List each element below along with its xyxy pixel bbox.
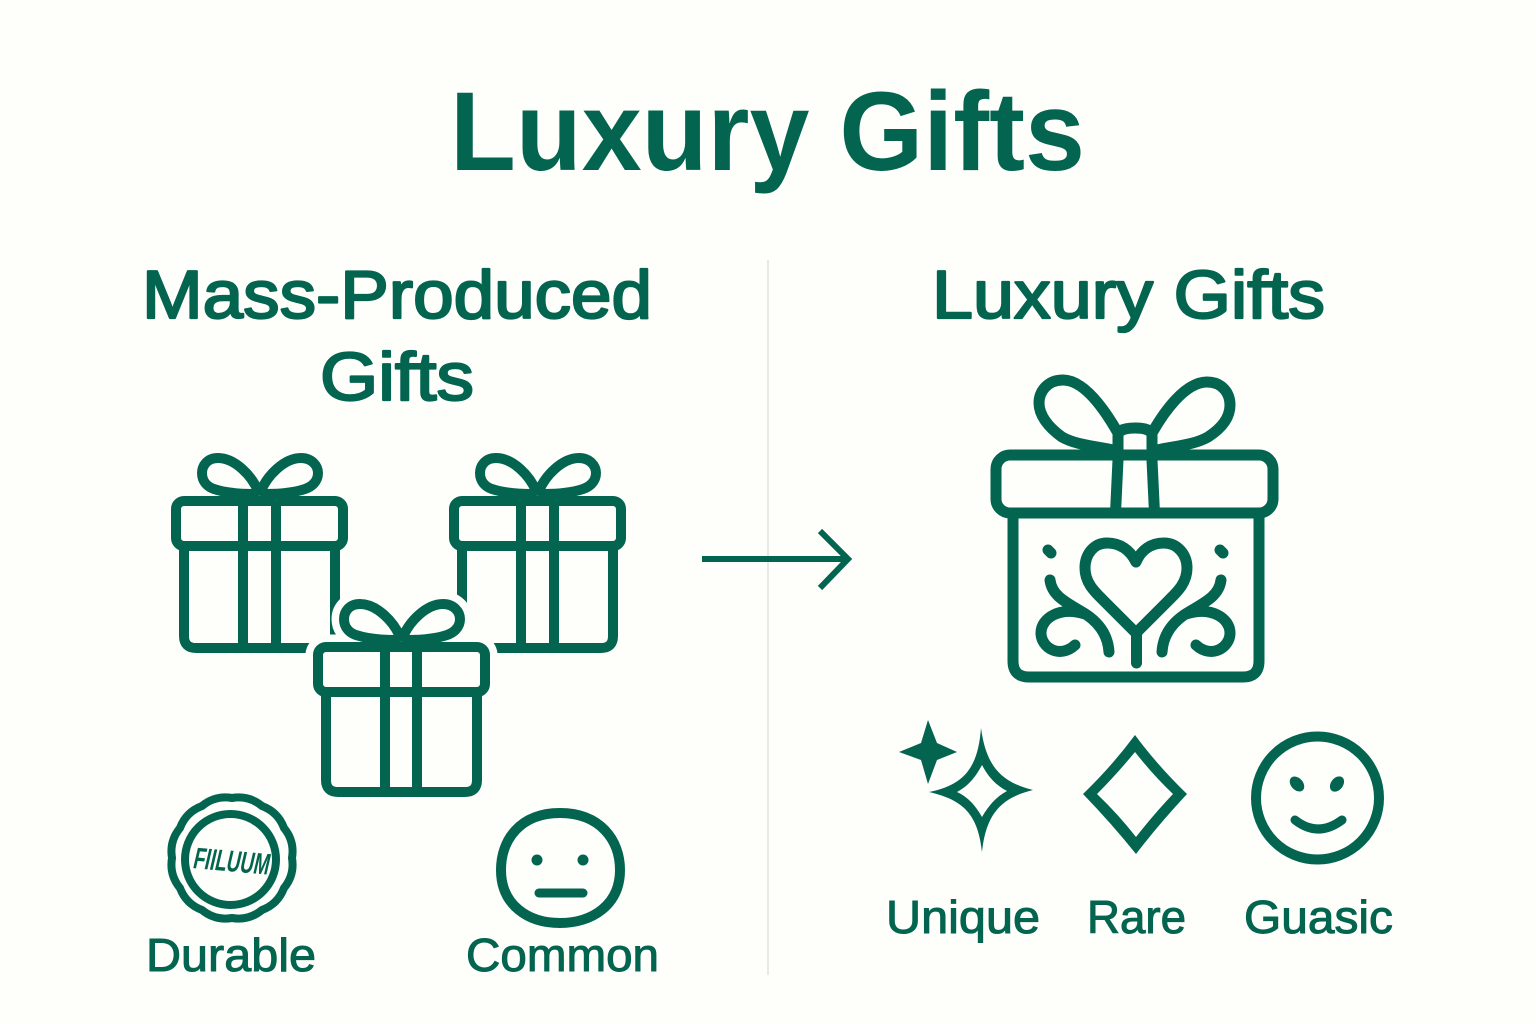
ornament: right swirl (1162, 550, 1230, 652)
panel: mass-produced gifts (142, 257, 659, 981)
heading: mass-produced gifts: Mass-Produced (142, 257, 652, 333)
heading: luxury gifts: Luxury Gifts (932, 257, 1325, 333)
icon: durable seal: FIILUUM (190, 843, 274, 881)
panel: luxury gifts (886, 257, 1393, 943)
ornament: left swirl (1041, 550, 1109, 652)
icon: durable seal (171, 797, 293, 919)
heading: mass-produced gifts: Gifts (320, 339, 474, 415)
label: unique: Unique (886, 891, 1040, 943)
icon: gift box left (176, 458, 343, 648)
icon: neutral face (501, 813, 620, 923)
arrow (702, 531, 848, 588)
icon: ornate gift box (996, 380, 1273, 677)
icon: gift box front (318, 604, 485, 792)
icon: sparkles (899, 720, 1033, 852)
label: guasic: Guasic (1244, 891, 1393, 943)
label: common: Common (466, 929, 659, 981)
title: Luxury Gifts (450, 69, 1085, 194)
heading: mass-produced gifts (142, 257, 652, 415)
label: rare: Rare (1087, 891, 1186, 943)
icon: group of three gift boxes (176, 458, 621, 792)
icon: gift box right (454, 458, 621, 648)
ornament: heart with stem (1085, 543, 1187, 663)
label: durable: Durable (146, 929, 316, 981)
icon: smiling face (1256, 736, 1379, 860)
icon: diamond (1083, 735, 1187, 854)
